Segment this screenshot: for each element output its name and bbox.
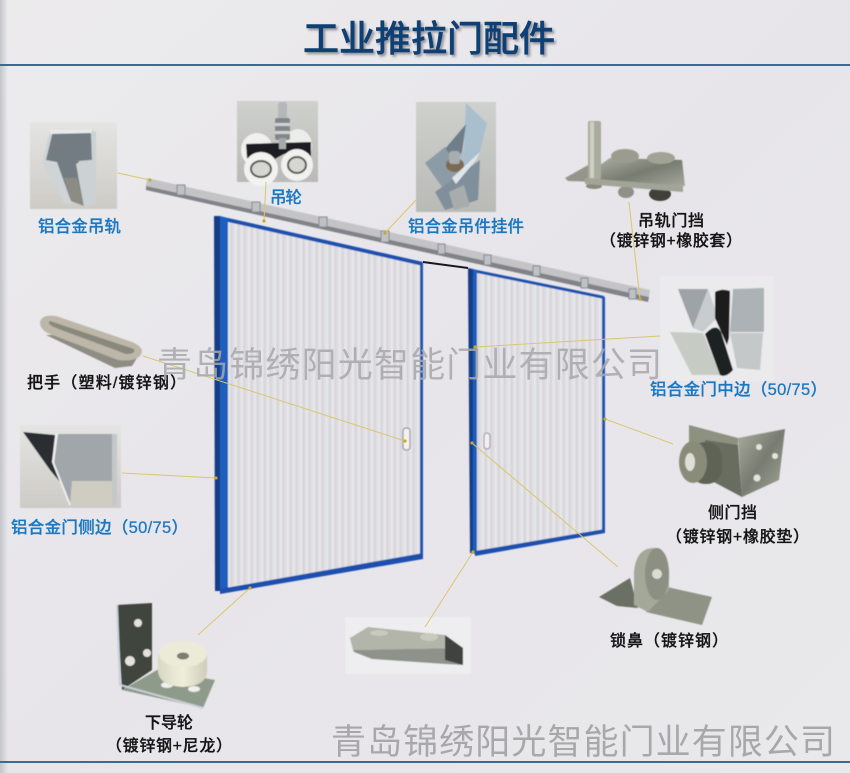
label: lower guide wheel: （镀锌钢+尼龙） xyxy=(106,737,232,755)
photo: handle xyxy=(40,316,142,368)
door panel xyxy=(228,221,420,587)
title: 工业推拉门配件 xyxy=(303,18,555,59)
photo: side door stopper xyxy=(679,425,785,497)
right door xyxy=(468,268,605,556)
photo: hanging wheel xyxy=(237,101,318,186)
label: rail door stopper: 吊轨门挡 xyxy=(638,211,704,230)
label: aluminium hanging rail: 铝合金吊轨 xyxy=(38,216,122,236)
photo: aluminium middle edge xyxy=(660,276,774,381)
label: side door stopper xyxy=(666,503,809,546)
hanging rail xyxy=(146,178,650,302)
photo: lower guide wheel xyxy=(117,603,215,708)
door handle xyxy=(403,428,410,450)
leader lines xyxy=(118,173,673,635)
door panel xyxy=(476,272,602,551)
top rule xyxy=(0,64,850,66)
photo: rail door stopper xyxy=(565,121,685,201)
label: lower guide wheel xyxy=(106,714,232,755)
watermark: middle: 青岛锦绣阳光智能门业有限公司 xyxy=(157,346,662,385)
rail brackets xyxy=(177,185,636,299)
label: hanger bracket: 铝合金吊件挂件 xyxy=(408,216,524,236)
label: aluminium side edge: 铝合金门侧边（50/75） xyxy=(11,517,188,537)
door handle xyxy=(484,433,490,449)
label: lower guide wheel: 下导轮 xyxy=(145,714,193,732)
track connector xyxy=(423,261,468,269)
watermark: bottom: 青岛锦绣阳光智能门业有限公司 xyxy=(331,723,835,762)
label: rail door stopper xyxy=(600,211,742,250)
left door xyxy=(214,216,423,594)
door frame xyxy=(468,268,605,556)
label: rail door stopper: （镀锌钢+橡胶套） xyxy=(600,232,742,250)
label: hanging wheel: 吊轮 xyxy=(270,188,302,207)
photo: lock nose xyxy=(599,548,712,625)
label: side door stopper: （镀锌钢+橡胶垫） xyxy=(666,528,809,546)
bottom rule xyxy=(0,761,850,763)
label: aluminium middle edge: 铝合金门中边（50/75） xyxy=(650,379,827,399)
photo: aluminium side edge xyxy=(20,425,121,508)
label: handle: 把手（塑料/镀锌钢） xyxy=(27,374,186,392)
label: lock nose: 锁鼻（镀锌钢） xyxy=(610,631,728,650)
label: side door stopper: 侧门挡 xyxy=(708,503,757,522)
door frame xyxy=(214,216,423,594)
photo: aluminium hanging rail xyxy=(30,122,117,209)
photo: floor guide block xyxy=(345,617,471,674)
photo: hanger bracket xyxy=(416,102,496,212)
